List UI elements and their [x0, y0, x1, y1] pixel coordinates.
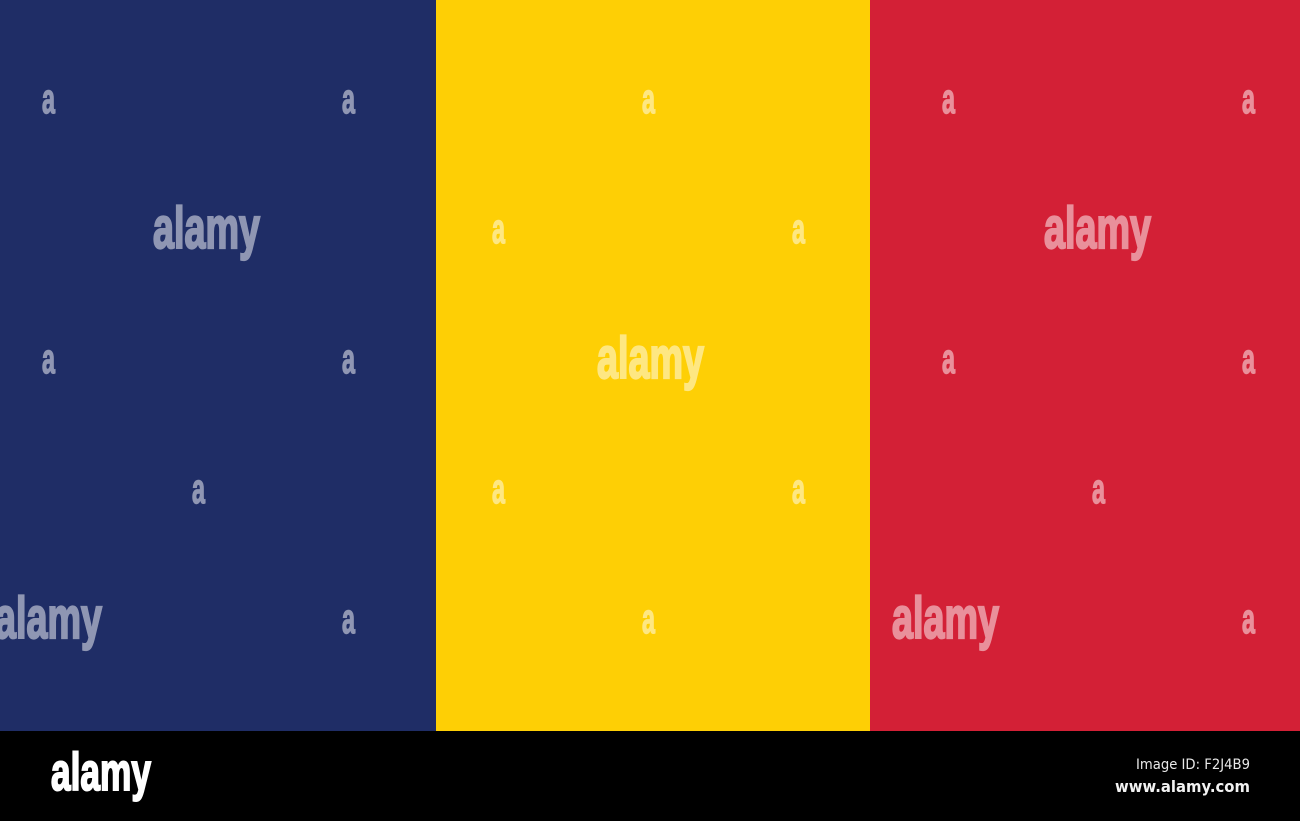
watermark: small letter marks	[42, 75, 1255, 642]
panel: red flag stripe	[870, 0, 1300, 731]
watermark: large wordmarks: alamy	[892, 586, 999, 651]
watermark: small letter marks: a	[942, 335, 955, 382]
watermark: small letter marks: a	[1242, 595, 1255, 642]
watermark: small letter marks: a	[492, 465, 505, 512]
watermark: large wordmarks: alamy	[1044, 196, 1151, 261]
watermark: small letter marks: a	[942, 75, 955, 122]
watermark: small letter marks: a	[1242, 75, 1255, 122]
footer image id: Image ID: F2J4B9	[1136, 757, 1250, 773]
watermark: large wordmarks: alamy	[153, 196, 260, 261]
watermark: small letter marks: a	[1242, 335, 1255, 382]
watermark: small letter marks: a	[342, 595, 355, 642]
watermark: small letter marks: a	[1092, 465, 1105, 512]
watermark: small letter marks: a	[492, 205, 505, 252]
watermark: small letter marks: a	[792, 205, 805, 252]
watermark: small letter marks: a	[42, 335, 55, 382]
watermark: small letter marks: a	[42, 75, 55, 122]
watermark: small letter marks: a	[192, 465, 205, 512]
footer website url: www.alamy.com	[1115, 777, 1250, 796]
watermark: large wordmarks: alamy	[597, 326, 704, 391]
watermark: small letter marks: a	[642, 75, 655, 122]
watermark: small letter marks: a	[342, 335, 355, 382]
panel: yellow flag stripe	[436, 0, 870, 731]
panel: blue flag stripe	[0, 0, 436, 731]
watermark: small letter marks: a	[792, 465, 805, 512]
footer logo: alamy	[51, 743, 151, 802]
watermark: small letter marks: a	[342, 75, 355, 122]
panel: black footer bar	[0, 731, 1300, 821]
watermark: large wordmarks	[0, 196, 1151, 651]
watermark: small letter marks: a	[642, 595, 655, 642]
